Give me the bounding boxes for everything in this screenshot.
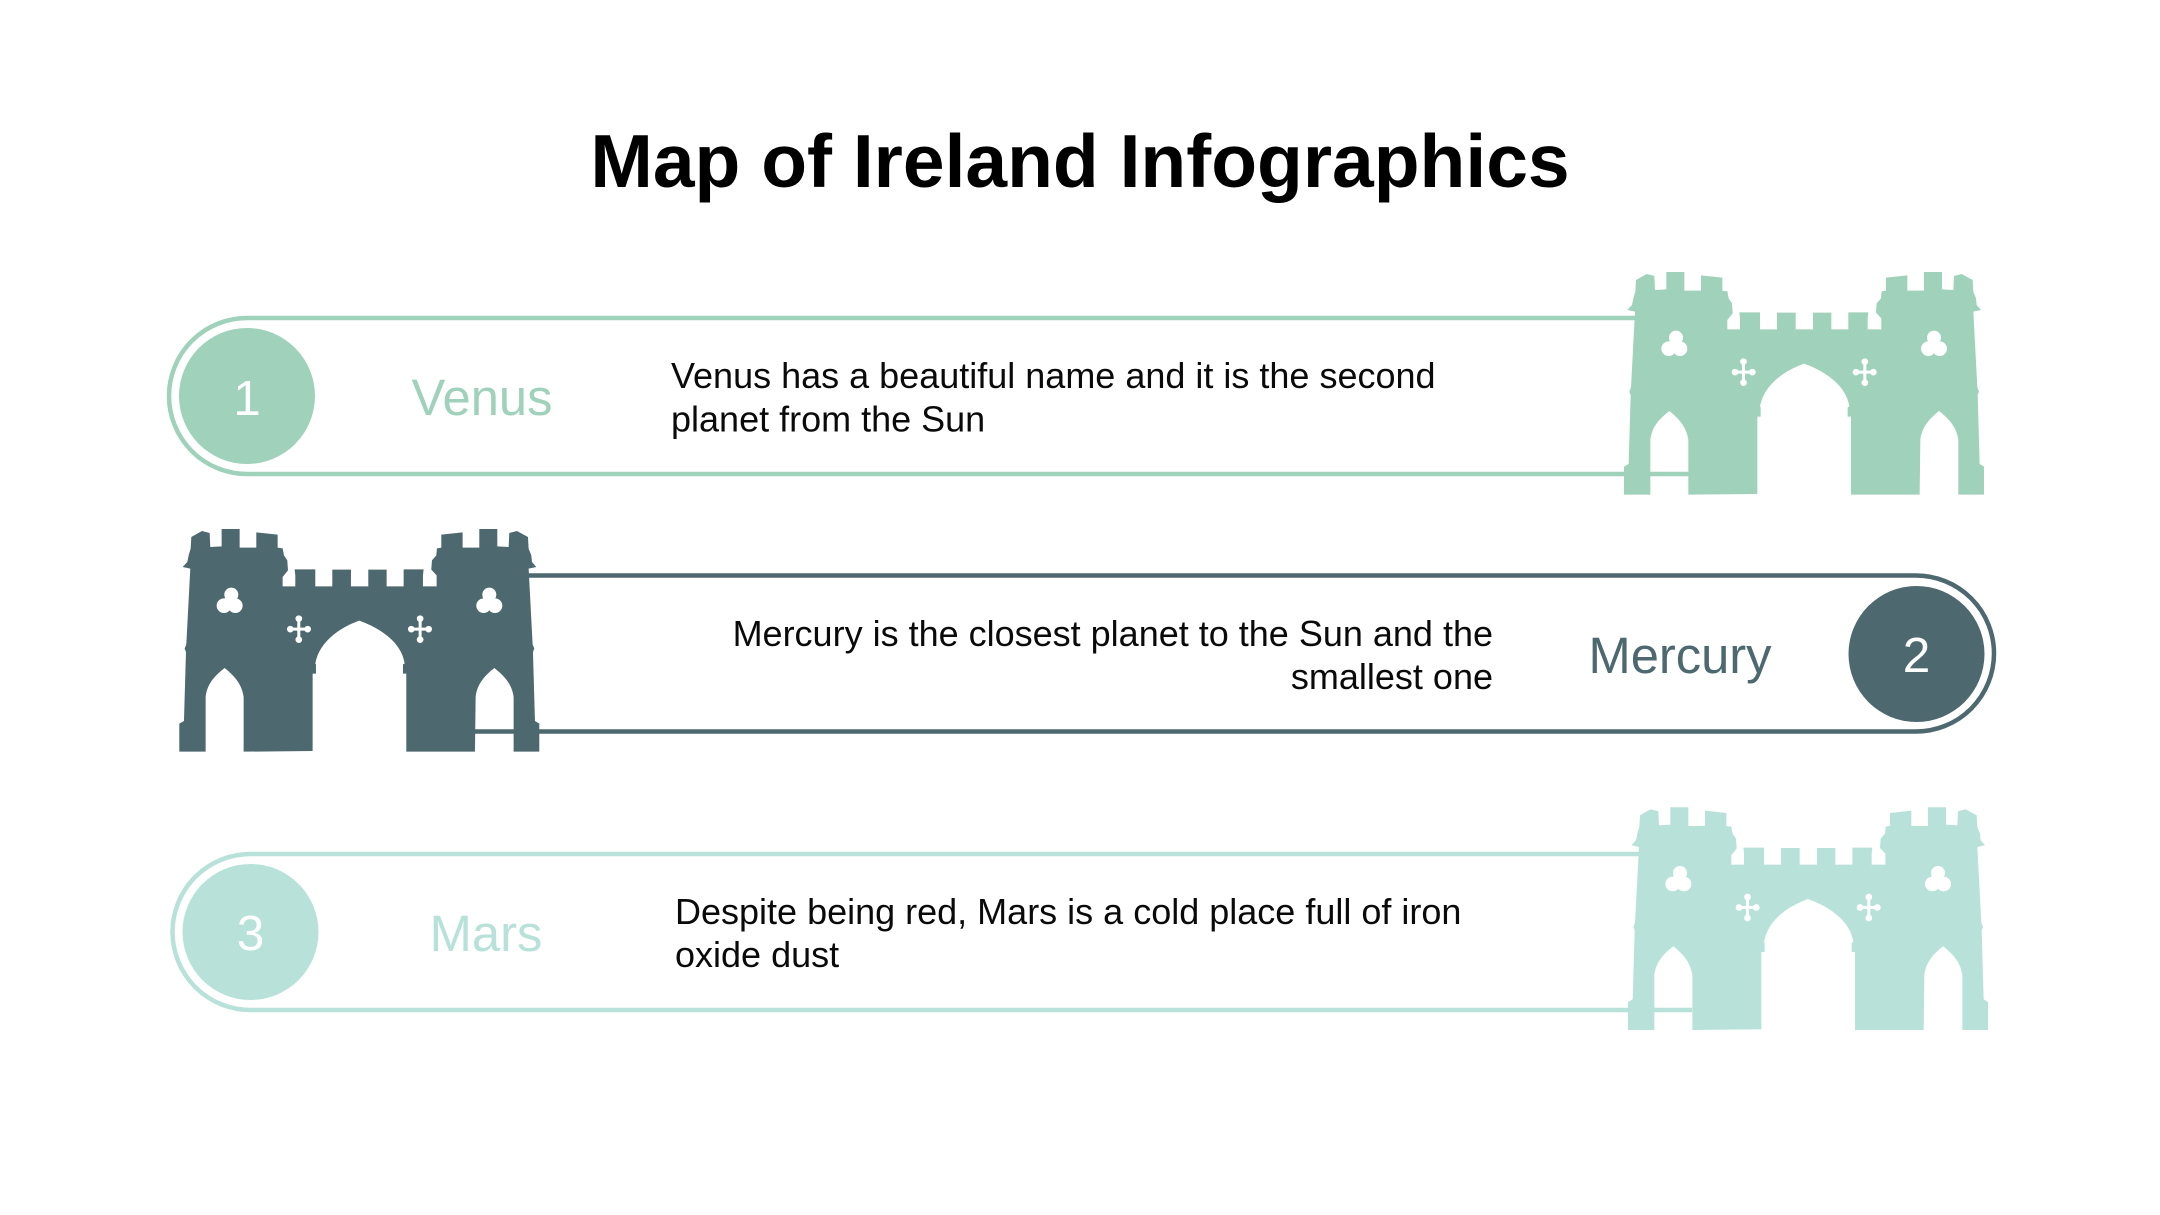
pill outline: Venus [169,318,1690,474]
panel: Mars [172,807,1988,1030]
number badge: 1: 1 [233,371,261,426]
pill outline: Mars [172,854,1692,1010]
number badge: 2: 2 [1903,628,1930,683]
title: Map of Ireland Infographics [590,119,1570,203]
icon: castle gate [179,529,539,752]
panel: Mercury [179,529,1994,752]
number badge: 1 [179,328,315,464]
description: Mercury: Mercury is the closest planet to the Sun and the [733,613,1493,654]
number badge: 2 [1848,586,1984,722]
number badge: 3: 3 [237,906,264,961]
name: Mars: Mars [430,905,542,962]
icon: castle gate [1624,272,1984,495]
number badge: 3 [182,864,318,1000]
description: Venus: planet from the Sun [671,398,985,440]
pill outline: Mercury [475,576,1994,732]
name: Venus: Venus [412,369,552,426]
panel: Venus [169,272,1984,495]
description: Venus: Venus has a beautiful name and it is the second [671,355,1436,396]
description: Mercury: smallest one [1291,656,1493,697]
description: Mars: oxide dust [675,934,839,975]
name: Mercury: Mercury [1588,627,1772,684]
description: Mars: Despite being red, Mars is a cold place full of iron [675,891,1461,932]
icon: castle gate [1628,807,1988,1030]
